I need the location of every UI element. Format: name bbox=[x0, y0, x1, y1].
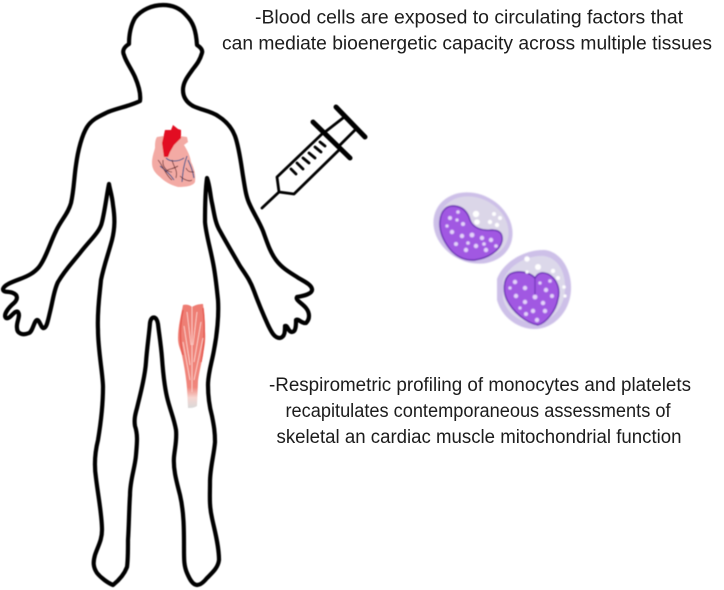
text: respirometric profiling statement bbox=[269, 375, 691, 448]
syringe barrel bbox=[262, 133, 339, 208]
text: respirometric profiling statement: skeletal an cardiac muscle mitochondrial function bbox=[276, 427, 682, 448]
text: blood cells statement: can mediate bioenergetic capacity across multiple tissues bbox=[222, 34, 712, 54]
icon: heart bbox=[152, 125, 195, 187]
icon: monocyte 2 bbox=[497, 250, 571, 329]
text: respirometric profiling statement: -Respirometric profiling of monocytes and platelets bbox=[269, 375, 691, 396]
text: blood cells statement bbox=[222, 8, 712, 54]
icon: leg muscle bbox=[178, 304, 205, 408]
text: respirometric profiling statement: recapitulates contemporaneous assessments of bbox=[286, 401, 671, 422]
syringe ticks bbox=[291, 142, 325, 174]
syringe plunger bbox=[325, 118, 355, 147]
body outline bbox=[3, 5, 312, 585]
icon: monocyte 1 bbox=[421, 179, 525, 277]
syringe handle and flange bbox=[313, 107, 365, 158]
text: blood cells statement: -Blood cells are exposed to circulating factors that bbox=[255, 8, 684, 28]
icon: syringe bbox=[262, 107, 365, 208]
